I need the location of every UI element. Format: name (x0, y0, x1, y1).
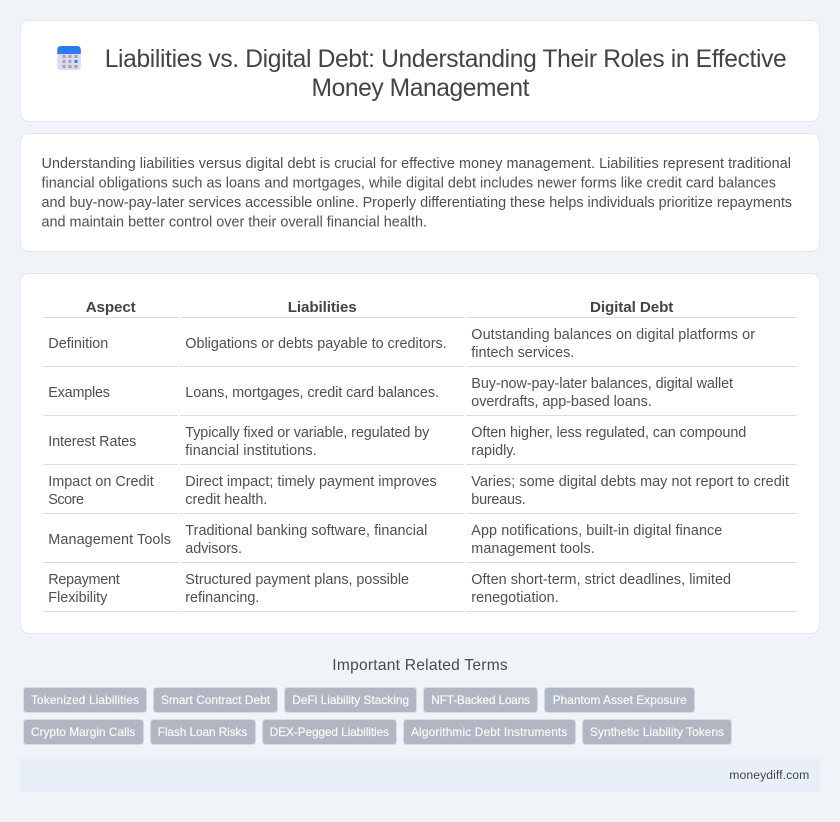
tag: dex-pegged liabilities: DEX-Pegged Liabilities (270, 725, 389, 739)
row: repayment flexibility: renegotiation. (471, 590, 559, 606)
heading: important related terms: Important Related Terms (332, 657, 508, 674)
row: management tools: Management Tools (48, 532, 171, 548)
panel: comparison table (20, 274, 820, 634)
row: impact on credit score: Impact on Credit (48, 474, 154, 490)
row: repayment flexibility: Often short-term, strict deadlines, limited (471, 572, 731, 588)
row: management tools: Traditional banking software, financial (185, 523, 427, 539)
row: examples: overdrafts, app-based loans. (471, 394, 652, 410)
row: impact on credit score: credit health. (185, 492, 267, 508)
tag: crypto margin calls (24, 720, 144, 744)
row: examples (43, 376, 797, 416)
row: repayment flexibility: Structured payment plans, possible (185, 572, 409, 588)
tag: defi liability stacking: DeFi Liability Stacking (292, 693, 409, 707)
row: interest rates: Often higher, less regulated, can compound (471, 425, 746, 441)
tag: nft-backed loans (424, 688, 538, 712)
intro paragraph: and maintain better control over their overall financial health. (42, 214, 427, 230)
related term tags (24, 688, 732, 744)
row: repayment flexibility (43, 572, 797, 612)
row: definition: Outstanding balances on digital platforms or (471, 327, 755, 343)
row: interest rates: financial institutions. (185, 443, 317, 459)
row: interest rates (43, 425, 797, 465)
tag: tokenized liabilities (24, 688, 146, 712)
row: definition: Definition (48, 336, 108, 352)
tag: tokenized liabilities: Tokenized Liabilities (31, 693, 139, 707)
table header row: Digital Debt (590, 299, 673, 316)
table header row: Liabilities (288, 299, 357, 316)
tag: synthetic liability tokens: Synthetic Liability Tokens (590, 725, 724, 739)
row: examples: Examples (48, 385, 110, 401)
row: examples: Buy-now-pay-later balances, digital wallet (471, 376, 733, 392)
row: repayment flexibility: Repayment (48, 572, 120, 588)
intro paragraph: and buy-now-pay-later services accessible online. Properly differentiating these helps individuals prioritize repayments (42, 195, 792, 211)
intro paragraph (42, 156, 792, 230)
title text: Liabilities vs. Digital Debt: Understanding Their Roles in Effective (105, 46, 787, 73)
tag: phantom asset exposure (544, 688, 694, 712)
tag: phantom asset exposure: Phantom Asset Exposure (553, 693, 687, 707)
row: examples: Loans, mortgages, credit card balances. (185, 385, 439, 401)
tag: crypto margin calls: Crypto Margin Calls (31, 725, 135, 739)
tag: dex-pegged liabilities (262, 720, 396, 744)
row: definition: Obligations or debts payable to creditors. (185, 336, 447, 352)
row: impact on credit score: Varies; some digital debts may not report to credit (471, 474, 789, 490)
row: management tools (43, 523, 797, 563)
tag: algorithmic debt instruments: Algorithmic Debt Instruments (411, 725, 567, 739)
title text: Money Management (312, 75, 530, 102)
footer source text: moneydiff.com (729, 768, 809, 782)
row: management tools: App notifications, built-in digital finance (471, 523, 722, 539)
title text (105, 46, 787, 102)
row: repayment flexibility: refinancing. (185, 590, 259, 606)
row: impact on credit score (43, 474, 797, 514)
table header row (43, 299, 797, 318)
row: impact on credit score: bureaus. (471, 492, 526, 508)
panel: introduction (20, 134, 820, 252)
row: definition: fintech services. (471, 345, 574, 361)
row: management tools: advisors. (185, 541, 242, 557)
table header row: Aspect (86, 299, 136, 316)
intro paragraph: financial obligations such as loans and mortgages, while digital debt includes newer forms like credit card balances (42, 175, 776, 191)
tag: smart contract debt: Smart Contract Debt (161, 693, 271, 707)
tag: synthetic liability tokens (582, 720, 732, 744)
icon: calendar (57, 46, 81, 70)
row: interest rates: Typically fixed or variable, regulated by (185, 425, 430, 441)
tag: algorithmic debt instruments (404, 720, 576, 744)
tag: defi liability stacking (284, 688, 416, 712)
panel: title header (20, 20, 820, 122)
row: impact on credit score: Score (48, 492, 84, 508)
row: impact on credit score: Direct impact; timely payment improves (185, 474, 437, 490)
intro paragraph: Understanding liabilities versus digital debt is crucial for effective money management. Liabilities represent traditional (42, 156, 791, 172)
row: interest rates: Interest Rates (48, 434, 136, 450)
tag: nft-backed loans: NFT-Backed Loans (431, 693, 530, 707)
tag: smart contract debt (154, 688, 278, 712)
tag: flash loan risks (150, 720, 256, 744)
footer bar (20, 758, 820, 792)
row: definition (43, 327, 797, 367)
row: management tools: management tools. (471, 541, 595, 557)
row: repayment flexibility: Flexibility (48, 590, 108, 606)
tag: flash loan risks: Flash Loan Risks (158, 725, 247, 739)
row: interest rates: rapidly. (471, 443, 516, 459)
